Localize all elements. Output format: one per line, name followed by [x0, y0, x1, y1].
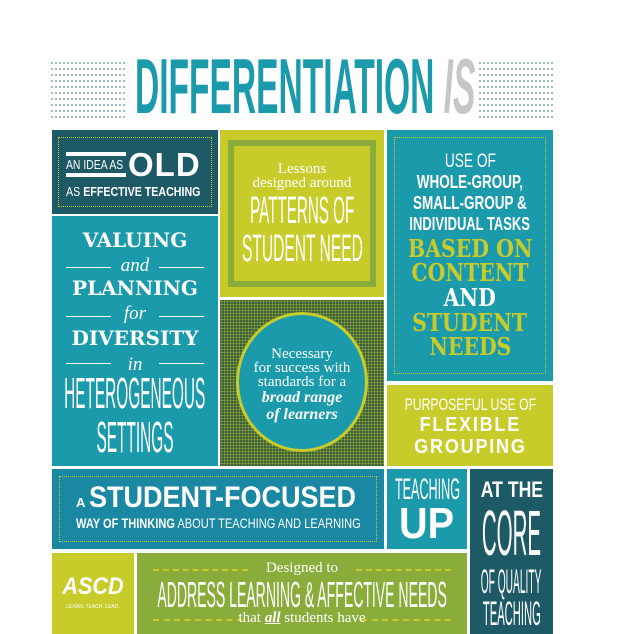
panel: student-focused: STUDENT-FOCUSED [89, 481, 356, 514]
panel: lessons patterns: PATTERNS OF [250, 190, 354, 232]
panel: old idea [52, 130, 218, 214]
circle: broad range [262, 389, 342, 406]
panel: use of tasks: USE OF [445, 151, 495, 172]
panel: ASCD logo: ASCD [62, 573, 124, 600]
panel: use of tasks: NEEDS [429, 332, 511, 361]
panel: old idea: AN IDEA AS [66, 157, 123, 172]
panel: teaching up [387, 469, 467, 549]
panel: valuing diversity: and [121, 255, 149, 276]
title dots left [50, 60, 126, 118]
panel: teaching up: TEACHING [394, 473, 460, 506]
panel: student-focused [52, 469, 384, 549]
panel: valuing diversity [52, 216, 218, 466]
panel: at the core: TEACHING [483, 595, 540, 633]
panel: lessons patterns: STUDENT NEED [242, 228, 362, 270]
panel: designed to: Designed to [266, 560, 338, 576]
panel: use of tasks [387, 130, 553, 381]
circle: of learners [266, 406, 338, 423]
panel: flexible grouping: GROUPING [414, 436, 526, 458]
panel: at the core: CORE [482, 497, 541, 569]
panel: at the core: OF QUALITY [481, 563, 542, 601]
panel: valuing diversity: for [124, 303, 146, 324]
panel: valuing diversity: PLANNING [72, 276, 198, 300]
panel: use of tasks: BASED ON [408, 234, 532, 263]
panel: student-focused: A [76, 495, 85, 510]
panel: use of tasks: INDIVIDUAL TASKS [410, 214, 530, 234]
panel: use of tasks: SMALL-GROUP & [413, 193, 527, 213]
panel: flexible grouping: PURPOSEFUL USE OF [404, 395, 536, 414]
panel: valuing diversity: in [128, 354, 142, 375]
panel: student-focused: WAY OF THINKING ABOUT TEACHING AND LEARNING [76, 515, 361, 531]
panel: designed to: that all students have [238, 610, 366, 626]
title: DIFFERENTIATION IS [135, 42, 475, 130]
circle: for success with [254, 360, 350, 376]
panel: at the core: AT THE [480, 477, 543, 502]
panel: teaching up: UP [399, 499, 455, 548]
panel: flexible grouping: FLEXIBLE [419, 414, 521, 436]
panel: ASCD logo: LEARN. TEACH. LEAD. [66, 604, 120, 610]
panel: ASCD logo [52, 553, 134, 634]
panel: use of tasks: CONTENT [411, 258, 529, 287]
circle: standards for a [258, 374, 346, 390]
panel: designed to: ADDRESS LEARNING & AFFECTIVE NEEDS [157, 574, 447, 615]
panel: lessons patterns [220, 130, 384, 297]
panel: use of tasks: AND [444, 283, 496, 312]
panel: at the core [470, 469, 553, 634]
panel: lessons patterns: Lessons [278, 161, 326, 177]
panel: valuing diversity: SETTINGS [96, 413, 174, 462]
panel: old idea: AS EFFECTIVE TEACHING [66, 184, 200, 199]
circle [236, 312, 368, 452]
panel: old idea: OLD [128, 146, 201, 183]
panel: use of tasks: WHOLE-GROUP, [417, 172, 523, 192]
panel: designed to [137, 553, 467, 634]
panel: lessons patterns: designed around [253, 175, 351, 191]
panel: use of tasks: STUDENT [413, 308, 527, 337]
panel: valuing diversity: DIVERSITY [71, 326, 199, 350]
circle: Necessary [271, 346, 333, 362]
panel: valuing diversity: VALUING [83, 228, 187, 252]
title dots right [478, 60, 553, 118]
panel: valuing diversity: HETEROGENEOUS [64, 369, 206, 418]
panel: necessary circle [220, 300, 384, 466]
panel: flexible grouping [387, 385, 553, 466]
